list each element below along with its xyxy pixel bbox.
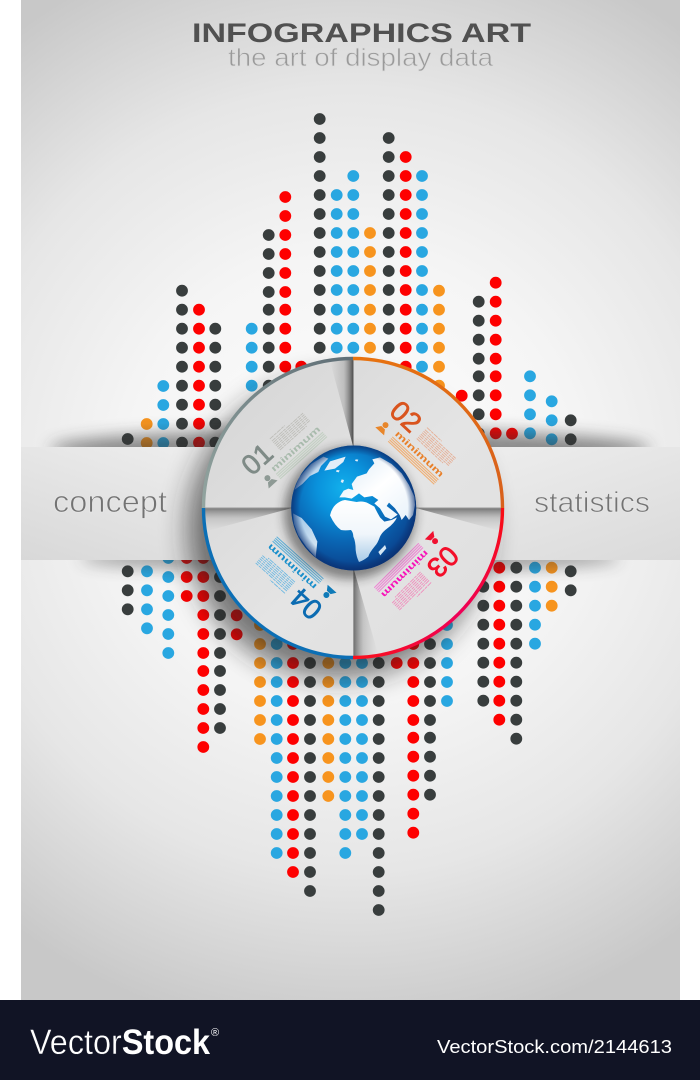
rim bottom-left: [204, 508, 353, 658]
dots column 16: [391, 657, 403, 669]
fold wedge left: [204, 508, 292, 531]
stripes: [273, 537, 323, 583]
dots column 5: [193, 310, 205, 443]
globe: [291, 446, 416, 570]
circle drop shadow: [188, 378, 488, 678]
dots column 20: [477, 587, 489, 701]
quadrant 02: [374, 395, 465, 484]
dot chart: upper columns: [122, 119, 571, 445]
dots column 2: [141, 424, 153, 443]
dots column 19: [441, 625, 453, 701]
dots column 19: [456, 390, 468, 402]
dot chart: lower columns: [128, 558, 571, 910]
quadrant 04: [246, 537, 338, 626]
heading: minimum: [269, 424, 322, 474]
dots column 14: [364, 233, 376, 348]
dots column 18: [433, 291, 445, 386]
stripes: [388, 437, 438, 484]
quadrant 03: [374, 529, 465, 620]
icon: [320, 585, 337, 601]
label: statistics: statistics: [534, 487, 650, 519]
disk face: [204, 358, 502, 656]
band right: statistics: [351, 447, 680, 560]
bar background: [0, 1000, 700, 1080]
registered mark: ®: [211, 1027, 219, 1039]
fold wedge right: [416, 508, 502, 531]
dots column 23: [529, 568, 541, 644]
dots column 9: [271, 644, 283, 853]
subtitle: the art of display data: [228, 44, 493, 72]
dots column 17: [416, 176, 428, 367]
dots column 6: [209, 329, 221, 443]
number 04: 04: [284, 582, 328, 626]
dots column 18: [424, 644, 436, 795]
dots column 12: [331, 195, 343, 348]
heading: minimum: [265, 542, 319, 592]
dots column 13: [339, 644, 351, 853]
dots column 21: [493, 568, 505, 720]
dots column 8: [254, 625, 266, 739]
band left: concept: [21, 447, 351, 560]
image id: VectorStock.com/2144613: [437, 1036, 672, 1057]
dots column 7: [246, 329, 258, 386]
dots column 25: [565, 420, 577, 439]
dots column 14: [356, 644, 368, 834]
heading: minimum: [379, 548, 431, 600]
dots column 1: [122, 571, 134, 609]
brand logo: VectorStock: [30, 1023, 210, 1062]
icon: [261, 472, 278, 488]
heading: minimum: [393, 429, 446, 479]
rim top-right: [353, 358, 502, 508]
quadrant 01: [235, 403, 327, 492]
continents: [293, 457, 415, 562]
divider lines: [204, 358, 503, 657]
paragraph lines: [254, 554, 295, 593]
globe shadow: [284, 447, 416, 579]
dots column 17: [407, 644, 419, 833]
paragraph lines: [270, 411, 311, 450]
dots column 1: [122, 433, 134, 445]
dots column 15: [383, 138, 395, 348]
dots column 21: [490, 283, 502, 433]
rim bottom-right: [353, 508, 502, 658]
icon: [425, 531, 441, 547]
dots column 25: [565, 571, 577, 590]
dots column 10: [295, 361, 307, 373]
ribbon band: [21, 447, 680, 560]
dots column 4: [181, 558, 193, 596]
fold wedge top-left: [330, 358, 353, 446]
band shadow above: [50, 429, 650, 469]
dots column 4: [176, 291, 188, 443]
paragraph lines: [417, 428, 458, 467]
stripes: [276, 432, 327, 479]
label: concept: concept: [53, 484, 167, 519]
Africa: [330, 500, 397, 562]
number 02: 02: [384, 395, 428, 439]
Eurasia and Arabia: [339, 457, 415, 520]
globe sphere: [291, 446, 416, 570]
dots column 13: [347, 176, 359, 348]
stripes: [374, 543, 423, 592]
icon: [375, 419, 392, 435]
dots column 2: [141, 571, 153, 628]
dots column 16: [400, 157, 412, 367]
dots column 3: [162, 558, 174, 653]
North America: [294, 457, 328, 490]
dots column 20: [473, 302, 485, 433]
dots column 11: [314, 119, 326, 348]
number 03: 03: [421, 540, 465, 584]
band shadow below: [80, 543, 620, 573]
dots column 22: [506, 428, 518, 440]
dots column 10: [287, 644, 299, 872]
dots column 12: [322, 644, 334, 796]
globe limb shade: [291, 446, 416, 570]
dots column 6: [214, 577, 226, 728]
dots column 24: [546, 401, 558, 439]
dots column 7: [231, 615, 243, 634]
South America: [293, 513, 317, 557]
dots column 5: [197, 558, 209, 747]
dots column 22: [510, 568, 522, 739]
paragraph lines: [391, 572, 431, 612]
title: INFOGRAPHICS ART: [192, 18, 531, 48]
dots column 11: [304, 644, 316, 891]
Greenland: [324, 457, 346, 471]
dots column 3: [157, 386, 169, 443]
Madagascar: [378, 545, 386, 555]
rim top-left: [204, 358, 353, 508]
dots column 9: [279, 197, 291, 367]
fold wedge bottom: [354, 570, 378, 657]
dots column 8: [263, 235, 275, 386]
watermark bar: [0, 1000, 700, 1080]
central circle: [204, 358, 503, 658]
islands: [336, 459, 358, 483]
dots column 15: [373, 644, 385, 910]
number 01: 01: [235, 437, 279, 481]
dots column 23: [524, 376, 536, 433]
dots column 24: [546, 568, 558, 606]
